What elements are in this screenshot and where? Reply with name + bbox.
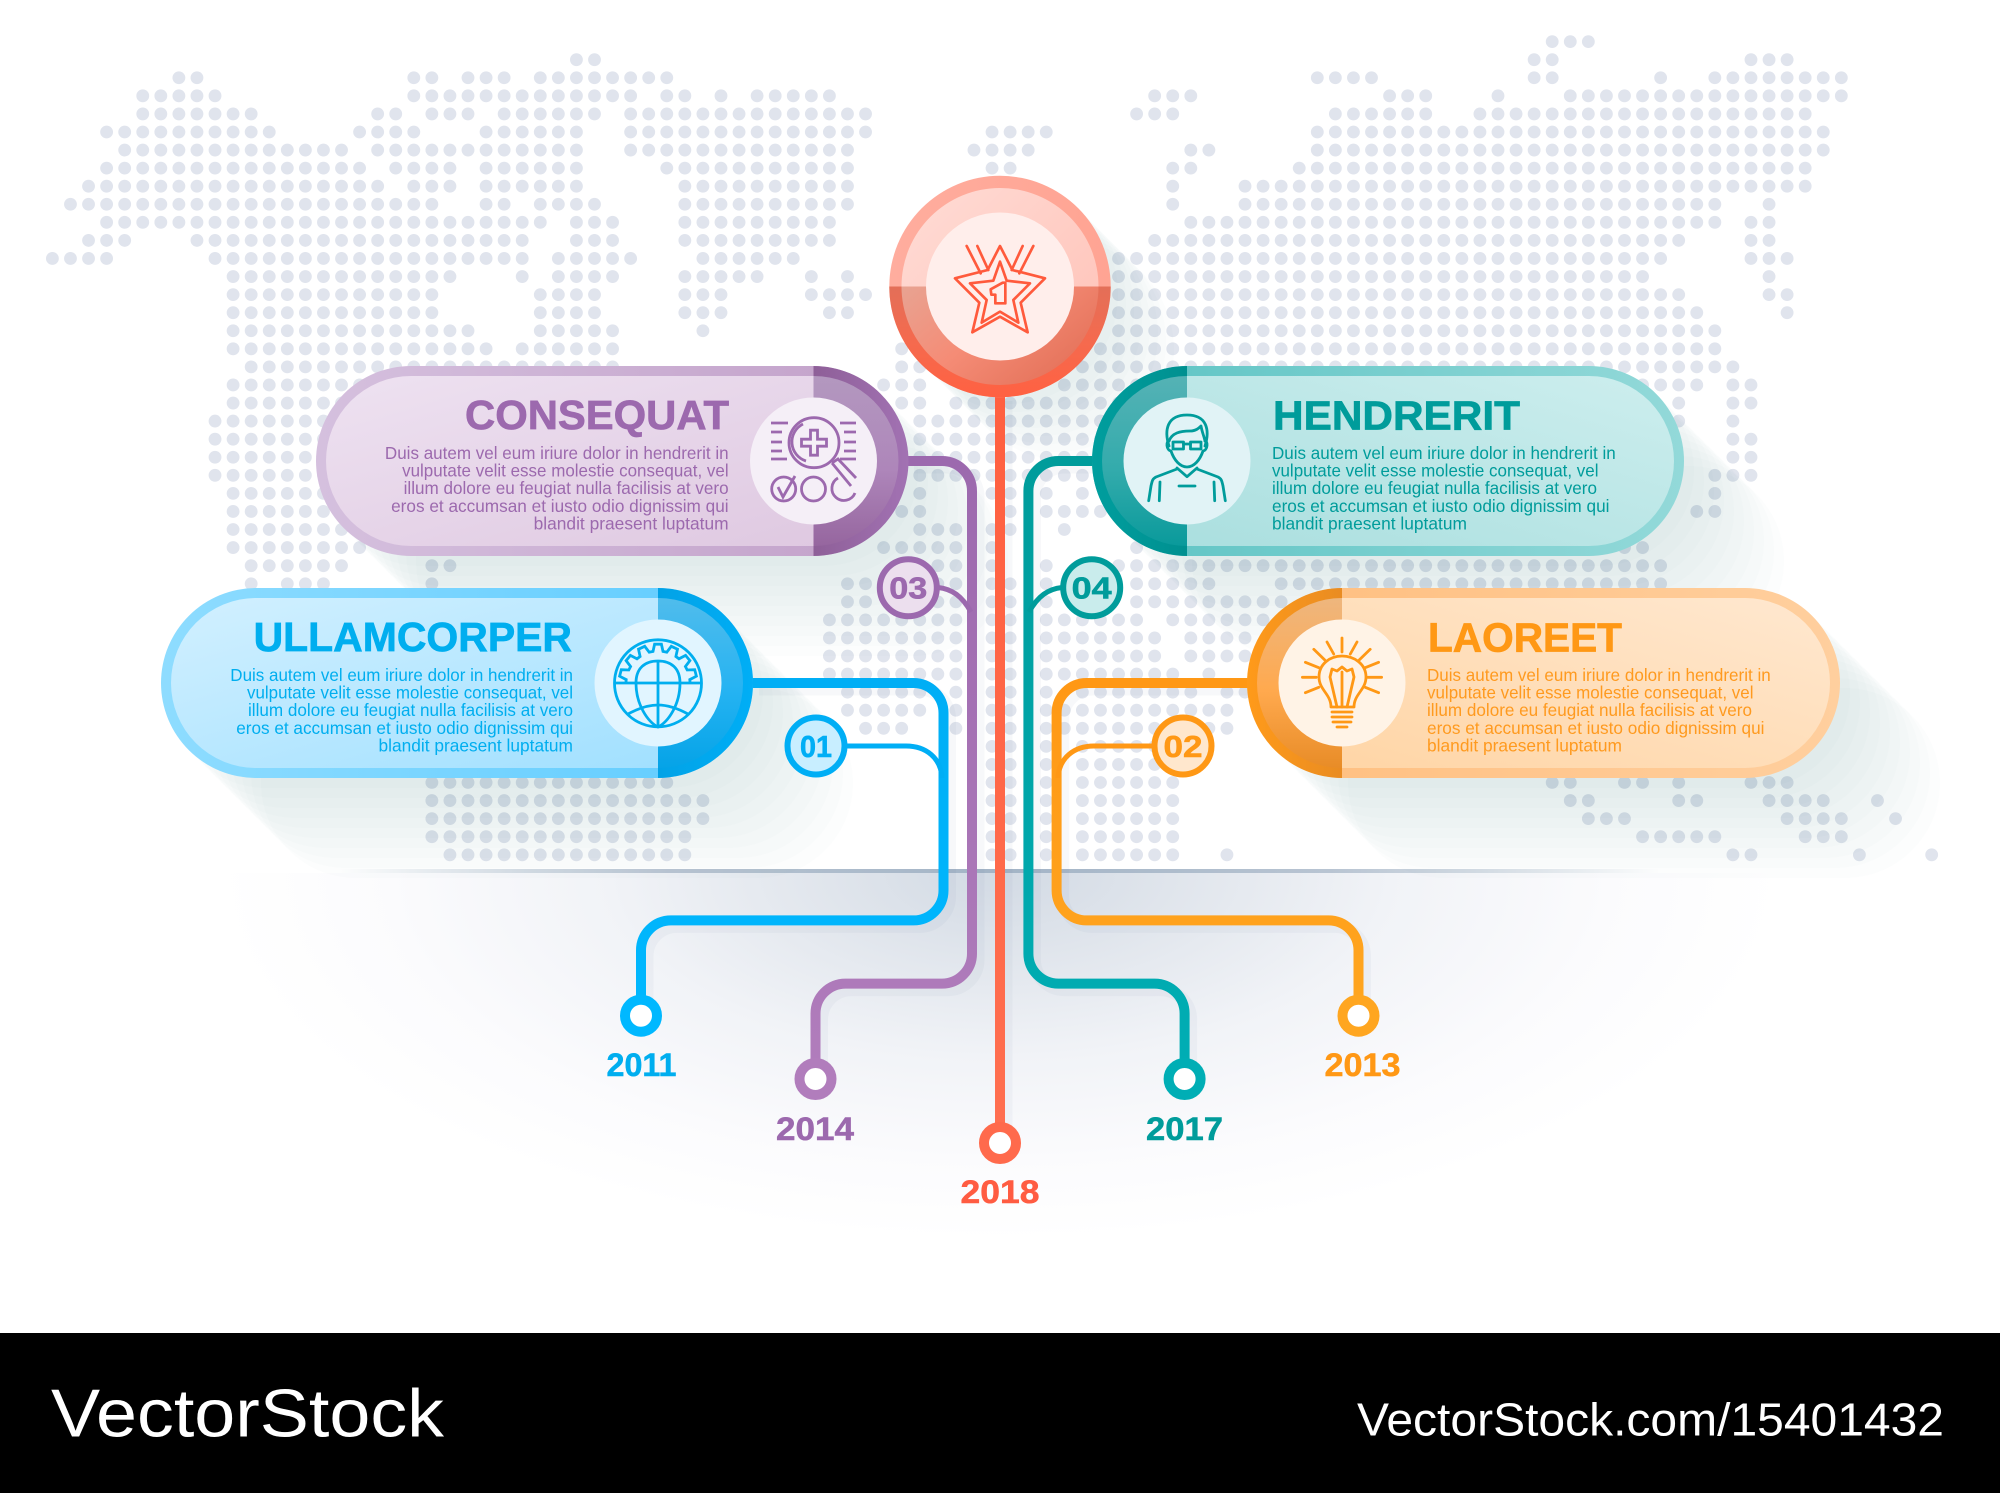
panel: consequat — [316, 366, 908, 556]
icon: star with number one — [955, 246, 1045, 332]
body text: vulputate velit esse molestie consequat, vel — [402, 461, 729, 481]
body text — [385, 443, 729, 533]
central award medallion — [889, 176, 1111, 397]
body text: blandit praesent luptatum — [1272, 513, 1467, 533]
horizon line — [340, 869, 1660, 873]
icon: globe with gear — [614, 640, 702, 727]
panel: hendrerit — [1092, 366, 1684, 556]
badge 04 — [1029, 559, 1120, 616]
body text: eros et accumsan et iusto odio dignissim qui — [391, 496, 729, 516]
year 2013: 2013 — [1324, 1047, 1400, 1083]
timeline: orange branch to 2013 — [1057, 683, 1374, 1032]
badge 01 — [788, 718, 942, 778]
badge 03: 03 — [889, 570, 927, 606]
body text: blandit praesent luptatum — [1427, 735, 1622, 755]
watermark bar — [0, 1333, 2000, 1493]
timeline line shadows — [647, 401, 1364, 1133]
body text: eros et accumsan et iusto odio dignissim qui — [236, 718, 573, 738]
timeline: purple branch to 2014 — [800, 461, 972, 1095]
body text: blandit praesent luptatum — [534, 513, 729, 533]
body text: Duis autem vel eum iriure dolor in hendrerit in — [1272, 443, 1616, 463]
body text: illum dolore eu feugiat nulla facilisis at vero — [1427, 700, 1752, 720]
badge 02 — [1058, 718, 1212, 778]
panel: laoreet — [1247, 588, 1840, 778]
year 2018: 2018 — [960, 1174, 1040, 1210]
watermark url: VectorStock.com/15401432 — [1357, 1394, 1944, 1446]
title: CONSEQUAT — [465, 392, 729, 438]
year 2017: 2017 — [1146, 1111, 1223, 1147]
body text: blandit praesent luptatum — [378, 735, 573, 755]
timeline: blue branch to 2011 — [625, 683, 944, 1032]
badge 04: 04 — [1072, 570, 1113, 606]
body text: eros et accumsan et iusto odio dignissim qui — [1272, 496, 1610, 516]
body text: Duis autem vel eum iriure dolor in hendrerit in — [230, 665, 573, 685]
icon: magnifier with checks — [771, 418, 856, 501]
dotted world map — [52, 42, 1933, 855]
panel: ullamcorper — [161, 588, 753, 778]
title: HENDRERIT — [1273, 392, 1520, 438]
body text: vulputate velit esse molestie consequat, vel — [1272, 461, 1598, 481]
body text: Duis autem vel eum iriure dolor in hendrerit in — [1427, 665, 1771, 685]
body text: illum dolore eu feugiat nulla facilisis at vero — [248, 700, 573, 720]
body text: eros et accumsan et iusto odio dignissim qui — [1427, 718, 1764, 738]
badge 03 — [880, 559, 971, 616]
title: ULLAMCORPER — [254, 614, 572, 660]
title: LAOREET — [1428, 615, 1622, 661]
badge 01: 01 — [800, 729, 832, 764]
icon: person with glasses — [1149, 415, 1225, 501]
floor shadow — [0, 873, 2000, 1313]
year 2011: 2011 — [606, 1047, 676, 1083]
body text — [230, 665, 573, 755]
badge 02: 02 — [1164, 729, 1202, 764]
body text: illum dolore eu feugiat nulla facilisis at vero — [404, 478, 729, 498]
timeline: 2018 stem and marker — [984, 390, 1016, 1159]
body text: vulputate velit esse molestie consequat, vel — [1427, 683, 1754, 703]
body text — [1272, 443, 1616, 533]
icon: light bulb — [1302, 638, 1382, 727]
long shadows of panels — [171, 184, 1940, 878]
body text — [1427, 665, 1771, 755]
timeline: teal branch to 2017 — [1028, 461, 1201, 1095]
body text: illum dolore eu feugiat nulla facilisis at vero — [1272, 478, 1597, 498]
watermark logo: VectorStock — [51, 1376, 445, 1452]
year 2014: 2014 — [776, 1111, 854, 1147]
body text: vulputate velit esse molestie consequat, vel — [247, 683, 573, 703]
body text: Duis autem vel eum iriure dolor in hendrerit in — [385, 443, 729, 463]
